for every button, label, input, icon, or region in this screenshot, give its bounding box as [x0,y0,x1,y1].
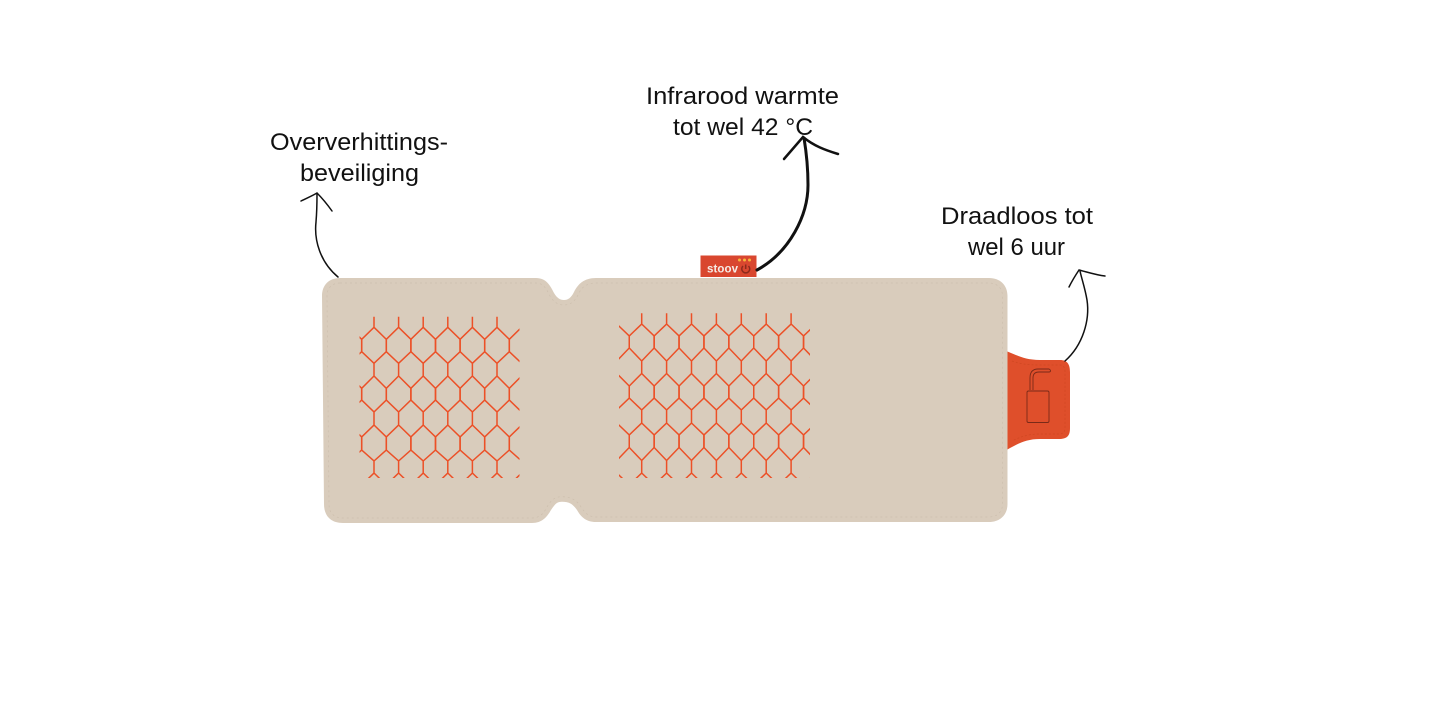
arrow: to infrared label [757,137,838,270]
icon: power button [742,264,750,273]
icon: battery with cable [1027,369,1050,422]
label: overheating protection: Oververhittings- [270,129,448,156]
label: wireless [941,203,1093,261]
heating grid: right [619,313,810,478]
label: infrared heat [646,83,839,141]
label: overheating protection: beveiliging [300,160,419,187]
control tag [700,256,756,277]
arrow: to wireless label [1065,270,1105,361]
handle: red battery pocket [1003,350,1070,452]
mat body [322,278,1008,523]
label: infrared heat: tot wel 42 °C [673,114,813,141]
tag brand: stoov [707,264,739,276]
label: wireless: wel 6 uur [967,234,1065,261]
heating grid: left [360,316,520,478]
stitching [327,283,1002,518]
product: heating mat [322,278,1008,523]
label: overheating protection [270,129,448,187]
indicator lights [738,258,751,262]
label: wireless: Draadloos tot [941,203,1093,230]
label: infrared heat: Infrarood warmte [646,83,839,110]
arrow: to overheating label [301,193,338,277]
